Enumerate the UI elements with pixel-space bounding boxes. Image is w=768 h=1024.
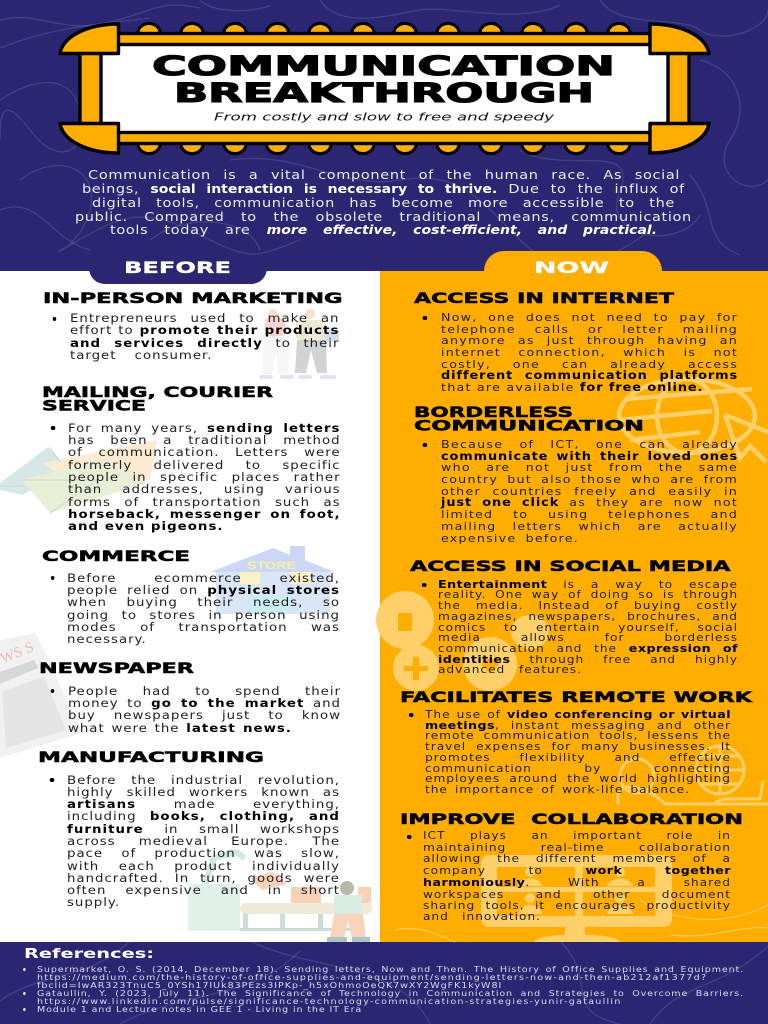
text: improve collaboration [406, 830, 731, 923]
before tab [89, 268, 267, 284]
text: access in social media: comics to entertain yourself, social [438, 622, 738, 634]
text: manufacturing: artisans made everything, [67, 797, 340, 811]
text: improve collaboration: allowing the different members of a [423, 853, 731, 865]
heading: borderless communication: BORDERLESS [414, 405, 573, 421]
text: mailing, courier service: forms of transportation such as [68, 495, 340, 509]
text: borderless communication: country but also those who are from [441, 473, 738, 486]
text: improve collaboration: company to work together [423, 864, 731, 877]
text: access in social media: magazines, newspapers, brochures, and [438, 611, 738, 623]
text: commerce [50, 571, 340, 646]
text: access in social media: advanced features. [438, 664, 582, 676]
references list: Supermarket, O. S. (2014, December 18). Sending letters, Now and Then. The History of Office Supplies and Equipment. [37, 964, 744, 974]
heading: commerce: COMMERCE [42, 549, 190, 565]
references list: fbclid=IwAR323TnuC5_0YSh17IUk83PEzs3IPKp-_h5xOhmoOeQK7wXY2WgFK1kyW8I [37, 980, 502, 990]
heading: access in internet: ACCESS IN INTERNET [414, 291, 674, 307]
text: improve collaboration: ICT plays an important role in [423, 830, 731, 842]
text: newspaper: money to go to the market and [68, 696, 341, 710]
background contour lines: top band [0, 0, 768, 256]
title text: COMMUNICATION [152, 51, 615, 82]
text: mailing, courier service: has been a traditional method [68, 433, 340, 447]
white title plate [100, 42, 670, 134]
intro paragraph: tools today are more effective, cost-efficient, and practical. [110, 222, 657, 237]
text: access in social media: identities through free and highly [438, 653, 738, 666]
before and now labels: BEFORE [124, 258, 231, 277]
text: mailing, courier service [50, 421, 340, 533]
text: access in social media [422, 578, 738, 676]
text: manufacturing: Before the industrial revolution, [67, 773, 340, 787]
text: access in internet [422, 311, 738, 394]
text: mailing, courier service: horseback, messenger on foot, [68, 507, 340, 521]
icon: social media bubbles [376, 591, 549, 691]
text: mailing, courier service: than addresses, using various [68, 482, 340, 496]
faded illustrations behind before text [0, 309, 372, 942]
text: borderless communication: who are not just from the same [441, 461, 738, 474]
text: manufacturing [50, 773, 340, 909]
text: access in social media: media allows for borderless [438, 632, 738, 644]
before and now labels [124, 258, 610, 277]
text: borderless communication: other countries freely and easily in [441, 485, 738, 498]
heading: mailing, courier service: MAILING, COURIER [42, 385, 273, 401]
text: facilitates remote work: remote communication tools, lessens the [425, 730, 731, 742]
text: mailing, courier service: formerly delivered to specific [68, 458, 340, 472]
references list: https://medium.com/the-history-of-office-supplies-and-equipment/sending-letters-now-and-then-ab212af1377d? [37, 972, 707, 982]
text: facilitates remote work: promotes flexibility and effective [425, 752, 731, 764]
text: facilitates remote work: employees around the world highlighting [425, 773, 731, 785]
intro paragraph [75, 167, 692, 237]
heading: borderless communication: COMMUNICATION [414, 418, 644, 434]
text: access in social media: Entertainment is a way to escape [438, 578, 738, 591]
text: manufacturing: with each product individually [67, 859, 340, 873]
text: commerce: Before ecommerce existed, [67, 571, 340, 585]
icon: remote worker line art [618, 746, 768, 804]
text: borderless communication: mailing letters which are actually [441, 520, 738, 533]
icon: shopping couple [259, 309, 339, 379]
icon: factory conveyor and worker [188, 852, 372, 942]
now tab [484, 251, 662, 273]
title text: BREAKTHROUGH [174, 78, 594, 109]
faded illustrations behind now text [376, 376, 768, 942]
text: manufacturing: across medieval Europe. The [67, 834, 340, 848]
text: commerce: when buying their needs, so [67, 595, 340, 609]
intro paragraph: Communication is a vital component of the human race. As social [88, 167, 680, 182]
icon: store building: STORE [247, 560, 296, 572]
references list: Module 1 and Lecture notes in GEE 1 - Living in the IT Era [37, 1004, 362, 1014]
text: improve collaboration: and innovation. [423, 911, 541, 923]
text: access in internet: anymore as just through having an [441, 334, 738, 347]
text: improve collaboration: harmoniously. With a shared [423, 876, 731, 889]
heading: borderless communication [414, 405, 644, 434]
text: access in internet: different communication platforms [441, 369, 738, 382]
text: manufacturing: pace of production was slow, [67, 846, 340, 860]
text: access in social media: communication and the expression of [438, 642, 738, 655]
text: facilitates remote work: meetings, instant messaging and other [425, 719, 731, 732]
panel: now [380, 271, 768, 942]
text: facilitates remote work [408, 708, 731, 796]
heading: mailing, courier service [42, 385, 274, 414]
panel: before [0, 271, 380, 942]
before and now labels: NOW [534, 258, 610, 277]
orange rails [80, 34, 689, 144]
text: improve collaboration: sharing tools, it encourages productivity [423, 900, 731, 912]
text: manufacturing: including books, clothing, and [67, 809, 340, 823]
text: facilitates remote work: communication by connecting [425, 762, 731, 774]
text: manufacturing: supply. [67, 895, 120, 909]
text: mailing, courier service: of communication. Letters were [68, 445, 340, 459]
subtitle: From costly and slow to free and speedy [214, 112, 555, 124]
text: commerce: going to stores in person using [67, 608, 340, 622]
heading: mailing, courier service: SERVICE [42, 398, 146, 414]
text: mailing, courier service: For many years, sending letters [68, 421, 340, 435]
text: facilitates remote work: travel expenses for many businesses. It [425, 741, 731, 753]
text: borderless communication: expensive before. [441, 532, 579, 545]
text: access in internet: internet connection, which is not [441, 346, 738, 359]
scalloped bumps along top and bottom [138, 24, 630, 154]
intro paragraph: digital tools, communication has become more accessible to the [92, 195, 675, 210]
text: in-person marketing: target consumer. [70, 348, 212, 362]
heading: access in social media: ACCESS IN SOCIAL MEDIA [410, 559, 730, 575]
text: in-person marketing: Entrepreneurs used to make an [70, 311, 339, 325]
text: newspaper [50, 684, 341, 735]
text: borderless communication: Because of ICT, one can already [441, 438, 738, 451]
text: manufacturing: highly skilled workers known as [67, 785, 340, 799]
text: newspaper: People had to spend their [68, 684, 341, 698]
text: in-person marketing: effort to promote their products [70, 323, 339, 337]
text: commerce: necessary. [67, 632, 147, 646]
icon: newspaper [0, 633, 82, 758]
text: borderless communication [422, 438, 738, 545]
intro paragraph: public. Compared to the obsolete traditional means, communication [75, 209, 692, 224]
icon: video conference monitor [481, 855, 672, 942]
text: commerce: modes of transportation was [67, 620, 340, 634]
text: in-person marketing: and services directly to their [70, 336, 339, 350]
text: borderless communication: communicate with their loved ones [441, 450, 738, 462]
text: borderless communication: just one click as they are now not [441, 496, 738, 509]
title banner frame [58, 22, 711, 155]
references list: https://www.linkedin.com/pulse/significance-technology-communication-strategies-yunir-gataullin [37, 996, 622, 1006]
text: access in internet: telephone calls or letter mailing [441, 322, 738, 336]
title text [152, 51, 615, 109]
corner caps [60, 24, 709, 153]
icon: globe with cursor [619, 379, 768, 462]
text: facilitates remote work: the importance of work-life balance. [425, 784, 690, 796]
intro paragraph: beings, social interaction is necessary to thrive. Due to the influx of [82, 181, 685, 196]
text: facilitates remote work: The use of video conferencing or virtual [425, 708, 731, 721]
text: manufacturing: furniture in small workshops [67, 822, 340, 836]
text: mailing, courier service: and even pigeons. [68, 519, 223, 533]
text: commerce: people relied on physical stores [67, 583, 340, 597]
text: manufacturing: handcrafted. In turn, goods were [67, 871, 340, 885]
references heading: References: [24, 946, 154, 962]
heading: in-person marketing: IN-PERSON MARKETING [43, 291, 342, 307]
references list: Gataullin, Y. (2023, July 11). The Significance of Technology in Communication and Strategies to Overcome Barriers. [37, 988, 744, 998]
text: newspaper: what were the latest news. [68, 721, 292, 735]
references list [23, 964, 744, 1014]
text: access in internet: costly, one can already access [441, 358, 738, 371]
text: mailing, courier service: people in specific places rather [68, 470, 340, 484]
heading: newspaper: NEWSPAPER [39, 661, 194, 677]
heading: facilitates remote work: FACILITATES REMOTE WORK [400, 690, 754, 706]
background contour lines: bottom band [0, 942, 768, 1024]
text: access in internet: that are available for free online. [441, 381, 703, 394]
heading: manufacturing: MANUFACTURING [38, 750, 264, 766]
text: improve collaboration: maintaining real-time collaboration [423, 842, 731, 854]
icon: envelopes [0, 440, 157, 513]
text: borderless communication: limited to using telephones and [441, 508, 738, 521]
text: access in internet: Now, one does not need to pay for [441, 311, 738, 324]
text: in-person marketing [52, 311, 339, 362]
text: improve collaboration: workspaces and other document [423, 889, 731, 901]
heading: improve collaboration: IMPROVE COLLABORATION [400, 812, 743, 828]
icon: store building [210, 546, 335, 614]
text: access in social media: the media. Instead of buying costly [438, 600, 738, 612]
text: manufacturing: often expensive and in short [67, 883, 340, 897]
text: newspaper: buy newspapers just to know [68, 708, 341, 722]
text: access in social media: reality. One way of doing so is through [438, 589, 738, 601]
